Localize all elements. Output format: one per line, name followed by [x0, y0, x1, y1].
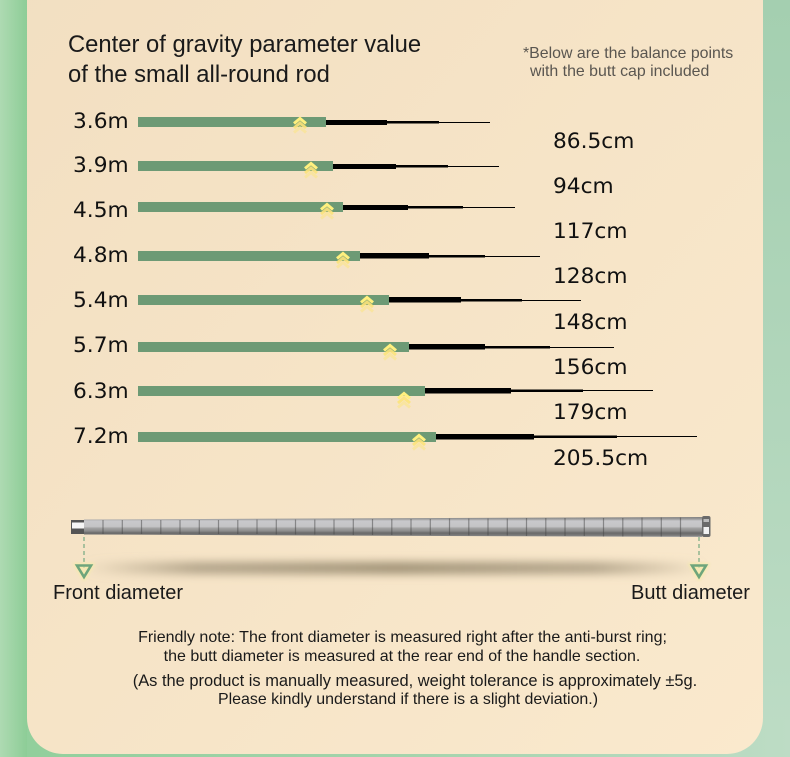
balance point values: 148cm [553, 310, 627, 335]
rod 4.8m row [73, 243, 540, 268]
rod 6.3m row [73, 379, 653, 408]
balance point values: 117cm [553, 219, 627, 244]
rod 3.6m row: 3.6m [73, 109, 129, 134]
rod 7.2m row [73, 424, 697, 450]
rod 5.4m row [73, 288, 581, 313]
rod 3.6m row [73, 109, 490, 134]
rod 6.3m row: 6.3m [73, 379, 129, 404]
balance point values: 94cm [553, 174, 614, 199]
rod 4.5m row [73, 198, 515, 223]
bottom background strip [27, 720, 790, 757]
butt diameter pointer [692, 537, 706, 577]
front diameter pointer [77, 537, 91, 577]
balance point note: *Below are the balance points [523, 45, 733, 62]
friendly note: the butt diameter is measured at the rear end of the handle section. [164, 648, 640, 665]
front diameter label: Front diameter [53, 582, 183, 604]
balance point values: 156cm [553, 355, 627, 380]
rod 4.5m row: 4.5m [73, 198, 129, 223]
rod 7.2m row: 7.2m [73, 424, 129, 449]
title: of the small all-round rod [68, 61, 330, 88]
tolerance note: Please kindly understand if there is a slight deviation.) [218, 691, 598, 708]
rod 3.9m row: 3.9m [73, 153, 129, 178]
balance point values: 205.5cm [553, 446, 648, 471]
balance point values: 179cm [553, 400, 627, 425]
tolerance note: (As the product is manually measured, weight tolerance is approximately ±5g. [133, 672, 697, 690]
balance point note: with the butt cap included [529, 63, 709, 80]
friendly note: Friendly note: The front diameter is measured right after the anti-burst ring; [138, 629, 667, 646]
rod 5.7m row: 5.7m [73, 333, 129, 358]
rod shadow [85, 562, 705, 574]
balance point values [553, 129, 648, 471]
front tip ring [71, 520, 84, 534]
balance point values: 128cm [553, 264, 627, 289]
rod 3.9m row [73, 153, 499, 178]
right background strip [763, 0, 790, 757]
butt diameter label: Butt diameter [631, 582, 750, 604]
rod 4.8m row: 4.8m [73, 243, 129, 268]
butt cap [702, 516, 710, 537]
rod 5.7m row [73, 333, 614, 360]
title: Center of gravity parameter value [68, 31, 421, 58]
balance point values: 86.5cm [553, 129, 634, 154]
telescopic rod illustration [71, 516, 710, 537]
rod 5.4m row: 5.4m [73, 288, 129, 313]
